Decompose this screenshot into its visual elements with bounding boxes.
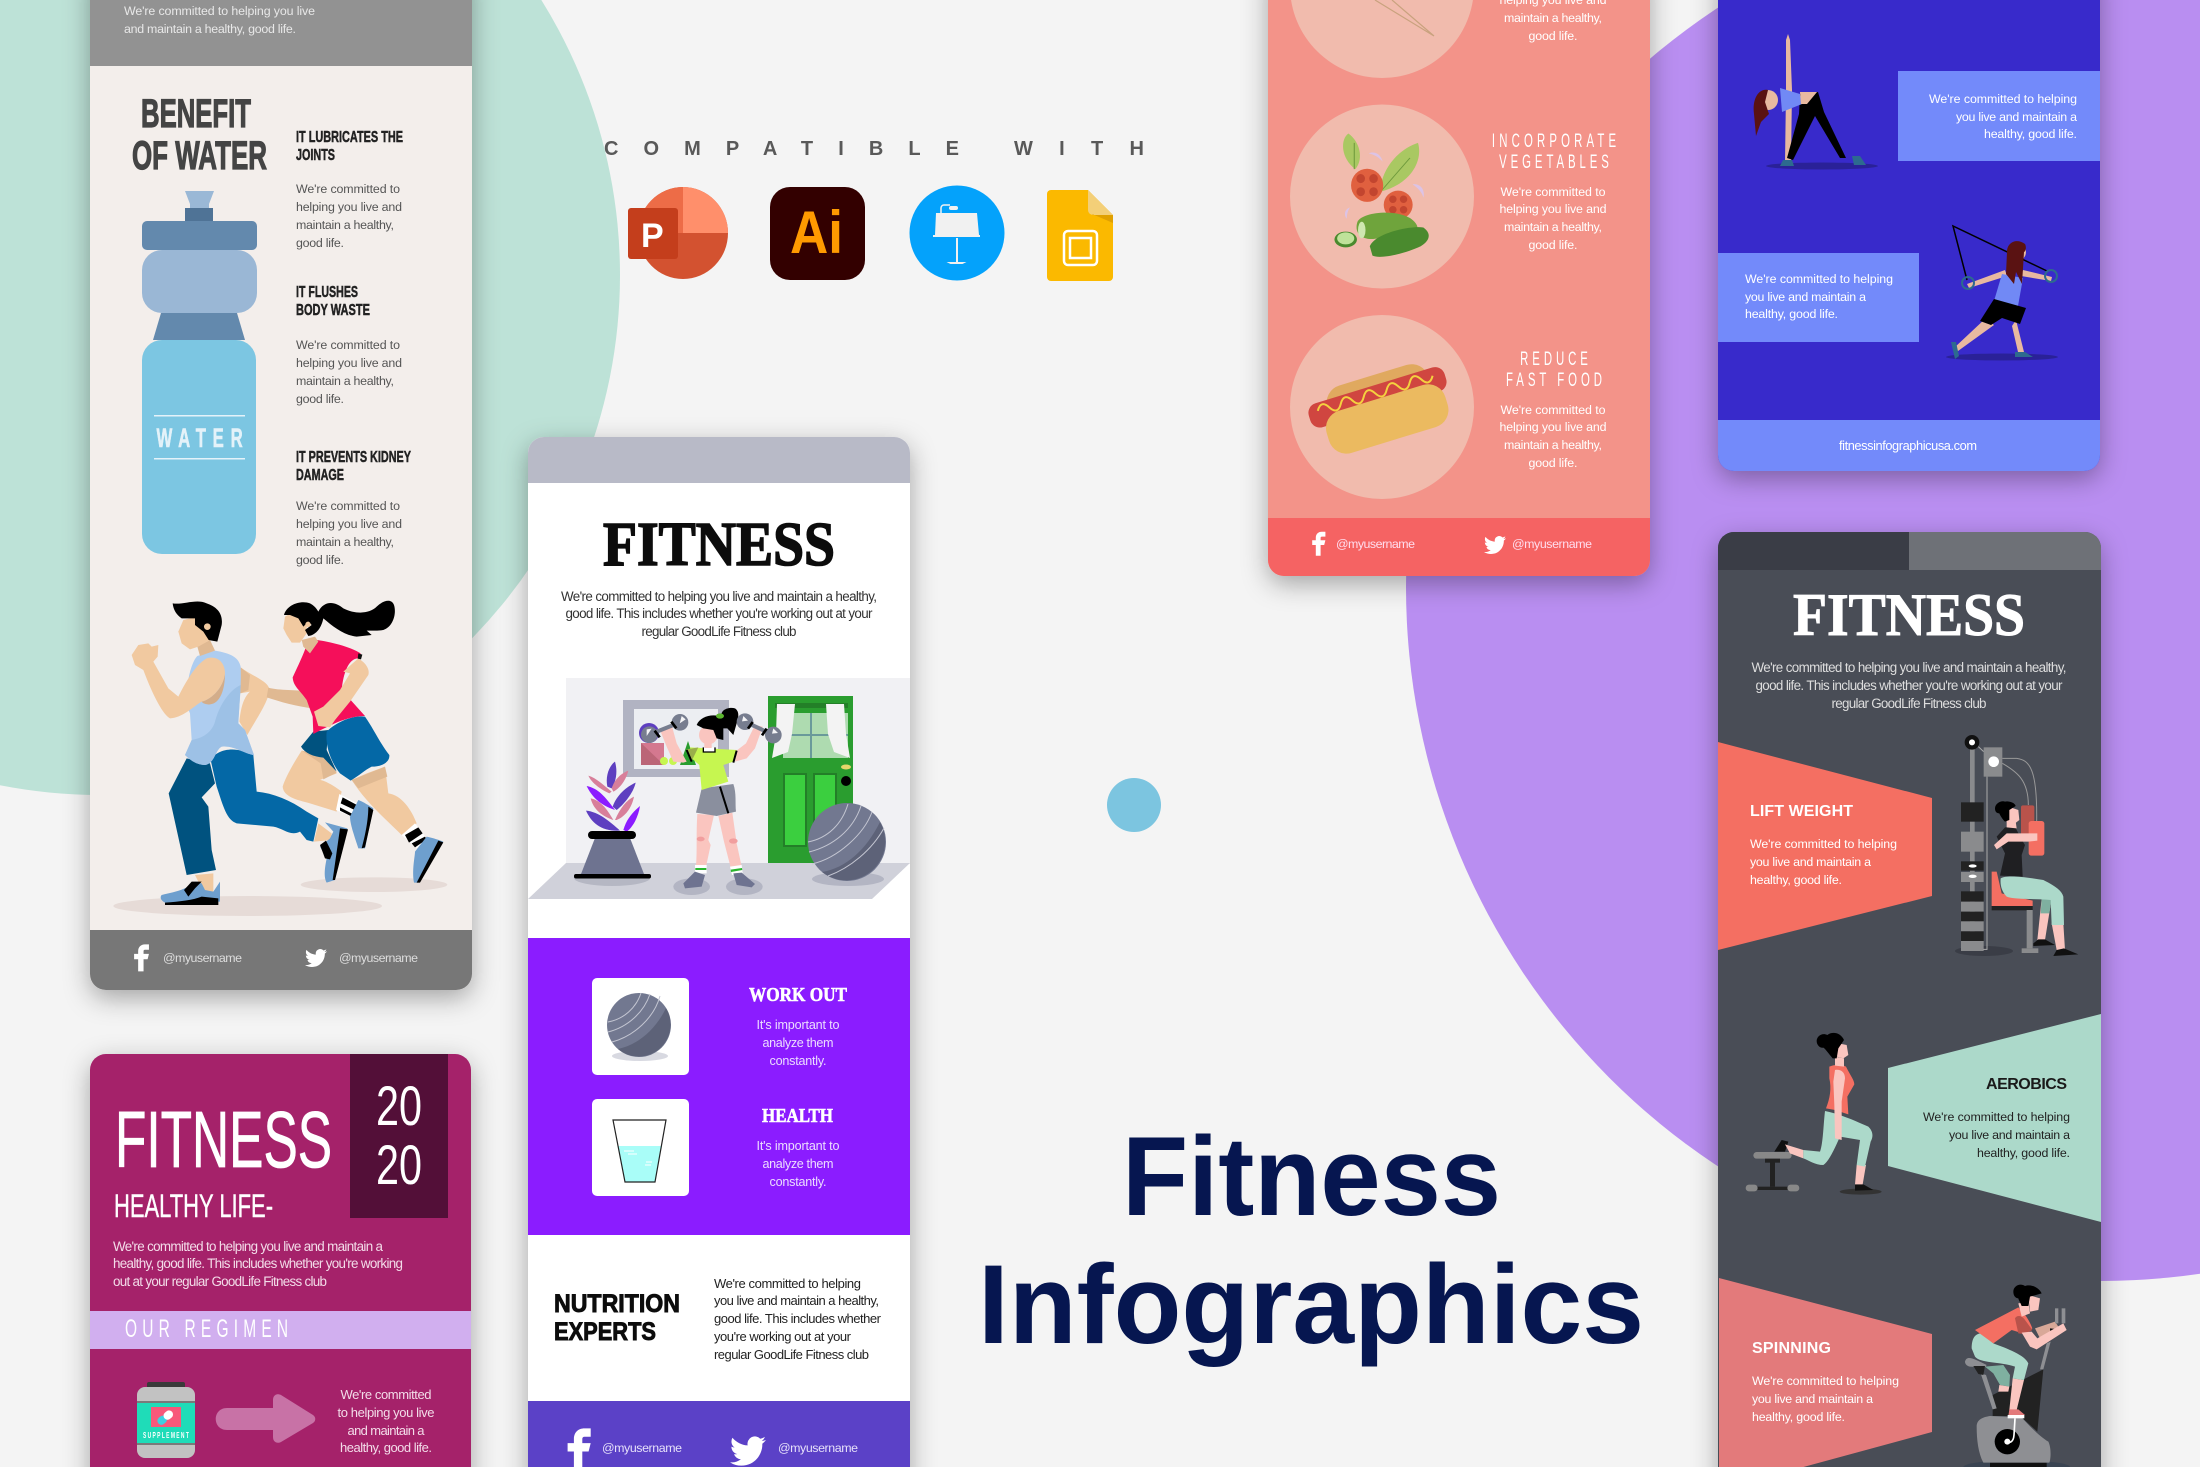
icon: water bottle	[142, 191, 257, 554]
heading: benefit of water: OF WATER	[132, 134, 267, 178]
benefit 3: prevents kidney damage: maintain a healthy,	[296, 535, 394, 549]
decorative mint circle	[0, 0, 620, 795]
panel: fitness white and purple	[528, 437, 910, 1467]
callout: spinning: We're committed to helping	[1752, 1374, 1899, 1388]
heading: nutrition experts: EXPERTS	[554, 1318, 656, 1346]
panel: nutrition salmon	[1268, 0, 1650, 576]
illustration: triangle pose	[1754, 34, 1878, 170]
intro text on grey band: We're committed to helping you live	[124, 4, 315, 18]
callout: bottom: you live and maintain a	[1745, 290, 1866, 304]
footer social handles: @myusername	[1336, 537, 1415, 551]
regimen text: and maintain a	[348, 1423, 425, 1438]
icon: twitter	[305, 949, 327, 967]
item: cut off top: maintain a healthy,	[1504, 11, 1602, 25]
benefit 1: lubricates joints	[296, 129, 403, 250]
item: reduce fast food: FAST FOOD	[1506, 370, 1602, 391]
benefit 2: flushes body waste: BODY WASTE	[296, 302, 370, 319]
regimen text	[338, 1387, 434, 1455]
intro text: We're committed to helping you live and maintain a healthy,	[1752, 660, 2066, 675]
benefit 1: lubricates joints: good life.	[296, 236, 344, 250]
callout: aerobics	[1888, 1014, 2101, 1222]
intro text: healthy, good life. This includes whether you're working	[113, 1256, 403, 1271]
heading: fitness: FITNESS	[1793, 582, 2025, 648]
panel: exercises blue	[1718, 0, 2100, 471]
row: work out: analyze them	[762, 1036, 834, 1050]
intro text	[1752, 660, 2066, 711]
row: health: HEALTH	[762, 1105, 833, 1127]
callout: aerobics: We're committed to helping	[1923, 1110, 2070, 1124]
icon: exercise ball	[607, 993, 671, 1061]
callout: spinning: SPINNING	[1752, 1340, 1831, 1357]
icon: vegetables	[1334, 133, 1429, 257]
decorative purple circle	[1406, 0, 2200, 1281]
intro text: regular GoodLife Fitness club	[642, 624, 796, 639]
year block: 20	[376, 1133, 422, 1196]
intro text	[113, 1239, 403, 1289]
row: health: It's important to	[756, 1139, 840, 1153]
illustration: spinning bike	[1963, 1285, 2070, 1467]
subheading: healthy life: HEALTHY LIFE-	[114, 1188, 273, 1224]
benefit 2: flushes body waste	[296, 284, 402, 406]
decorative blue dot	[1107, 778, 1161, 832]
item: reduce fast food	[1290, 315, 1607, 499]
callout: bottom: We're committed to helping	[1745, 272, 1893, 286]
callout: lift weight	[1718, 742, 1932, 950]
row: health: analyze them	[762, 1157, 834, 1171]
footer social handles	[1312, 532, 1592, 556]
intro text: good life. This includes whether you're working out at your	[566, 606, 873, 621]
callout: spinning: healthy, good life.	[1752, 1410, 1845, 1424]
item: incorporate vegetables: good life.	[1528, 238, 1578, 252]
footer social handles: @myusername	[602, 1441, 682, 1455]
item: incorporate vegetables: VEGETABLES	[1499, 152, 1609, 173]
benefit 2: flushes body waste: We're committed to	[296, 338, 400, 352]
illustration: weight machine	[1955, 735, 2078, 956]
regimen text: healthy, good life.	[340, 1440, 432, 1455]
benefit 3: prevents kidney damage: good life.	[296, 553, 344, 567]
nutrition text	[714, 1276, 882, 1362]
row: health	[592, 1099, 840, 1196]
compatible with heading: COMPATIBLE	[604, 138, 959, 160]
intro text: We're committed to helping you live and maintain a healthy,	[561, 589, 877, 604]
item: incorporate vegetables: INCORPORATE	[1492, 131, 1616, 152]
item: incorporate vegetables	[1290, 104, 1616, 288]
nutrition text: We're committed to helping	[714, 1276, 861, 1291]
intro text: good life. This includes whether you're working out at your	[1756, 678, 2063, 693]
main title: Infographics	[978, 1242, 1644, 1367]
heading: fitness: FITNESS	[603, 511, 835, 579]
icon: keynote	[910, 186, 1004, 280]
benefit 2: flushes body waste: maintain a healthy,	[296, 374, 394, 388]
regimen text: to helping you live	[338, 1405, 434, 1420]
icon: powerpoint	[628, 187, 728, 279]
item: reduce fast food: good life.	[1528, 456, 1578, 470]
intro text on grey band: and maintain a healthy, good life.	[124, 22, 296, 36]
callout: aerobics: AEROBICS	[1986, 1076, 2067, 1093]
callout: bottom	[1718, 253, 1919, 342]
benefit 3: prevents kidney damage: We're committed to	[296, 499, 400, 513]
item: reduce fast food: maintain a healthy,	[1504, 438, 1602, 452]
icon: illustrator	[770, 187, 865, 280]
icon: facebook	[568, 1428, 591, 1467]
benefit 2: flushes body waste: helping you live and	[296, 356, 402, 370]
heading: benefit of water: BENEFIT	[141, 92, 251, 136]
item: reduce fast food: helping you live and	[1500, 420, 1607, 434]
footer social handles	[568, 1428, 858, 1467]
benefit 3: prevents kidney damage: DAMAGE	[296, 467, 344, 484]
item: reduce fast food: We're committed to	[1500, 403, 1606, 417]
nutrition text: you're working out at your	[714, 1329, 852, 1344]
illustration: two runners	[113, 601, 447, 916]
icon: hot dog	[1303, 355, 1459, 462]
item: cut off top: good life.	[1528, 29, 1578, 43]
row: work out: It's important to	[756, 1018, 840, 1032]
callout: lift weight: healthy, good life.	[1750, 873, 1842, 887]
band: our regimen: OUR REGIMEN	[125, 1315, 288, 1343]
panel: benefit of water	[90, 0, 472, 990]
benefit 3: prevents kidney damage: helping you live and	[296, 517, 402, 531]
callout: top: healthy, good life.	[1984, 127, 2077, 141]
nutrition text: good life. This includes whether	[714, 1311, 882, 1326]
regimen text: We're committed	[340, 1387, 432, 1402]
row: work out: WORK OUT	[749, 984, 848, 1006]
illustration: home workout	[528, 678, 910, 899]
item: incorporate vegetables: maintain a healthy,	[1504, 220, 1602, 234]
panel: fitness 2020 magenta	[90, 1054, 471, 1467]
item: reduce fast food: REDUCE	[1520, 349, 1588, 370]
icon: google slides	[1047, 190, 1113, 281]
row: work out	[592, 978, 848, 1075]
icon: facebook	[1312, 532, 1325, 556]
intro text: We're committed to helping you live and maintain a	[113, 1239, 384, 1254]
callout: spinning	[1719, 1278, 1932, 1467]
main title: Fitness	[1122, 1114, 1501, 1239]
callout: lift weight: We're committed to helping	[1750, 837, 1897, 851]
callout: top: We're committed to helping	[1929, 92, 2077, 106]
benefit 1: lubricates joints: IT LUBRICATES THE	[296, 129, 403, 146]
intro text on grey band	[124, 4, 315, 36]
callout: aerobics: you live and maintain a	[1949, 1128, 2070, 1142]
heading: nutrition experts: NUTRITION	[554, 1290, 680, 1318]
item: cut off top	[1290, 0, 1607, 78]
icon: supplement bottle: SUPPLEMENT	[143, 1432, 189, 1440]
benefit 3: prevents kidney damage: IT PREVENTS KIDNEY	[296, 449, 411, 466]
row: health: constantly.	[770, 1175, 826, 1189]
icon: water bottle: WATER	[156, 423, 243, 453]
compatible with heading	[604, 138, 1144, 160]
main title	[978, 1114, 1644, 1367]
row: work out: constantly.	[770, 1054, 826, 1068]
benefit 1: lubricates joints: JOINTS	[296, 147, 335, 164]
compatible with heading: WITH	[1014, 138, 1144, 160]
icon: glass of water	[613, 1120, 666, 1182]
panel: fitness dark	[1718, 532, 2101, 1467]
benefit 3: prevents kidney damage	[296, 449, 411, 567]
callout: lift weight: you live and maintain a	[1750, 855, 1871, 869]
footer social handles: @myusername	[778, 1441, 858, 1455]
callout: bottom: healthy, good life.	[1745, 307, 1838, 321]
intro text	[561, 589, 877, 639]
heading: nutrition experts	[554, 1290, 680, 1346]
benefit 2: flushes body waste: IT FLUSHES	[296, 284, 358, 301]
icon: twitter	[1484, 536, 1506, 554]
arrow	[216, 1394, 315, 1443]
year block	[350, 1054, 448, 1218]
callout: spinning: you live and maintain a	[1752, 1392, 1873, 1406]
item: incorporate vegetables: helping you live and	[1500, 202, 1607, 216]
heading: benefit of water	[132, 92, 267, 178]
benefit 2: flushes body waste: good life.	[296, 392, 344, 406]
website url: fitnessinfographicusa.com	[1839, 438, 1977, 453]
icon: facebook	[134, 944, 149, 971]
benefit 1: lubricates joints: We're committed to	[296, 182, 400, 196]
benefit 1: lubricates joints: helping you live and	[296, 200, 402, 214]
heading: fitness: FITNESS	[115, 1095, 332, 1184]
band: our regimen	[90, 1311, 471, 1349]
footer social handles: @myusername	[1512, 537, 1592, 551]
illustration: lunge on bench	[1746, 1033, 1882, 1195]
icon: illustrator: Ai	[790, 199, 843, 266]
nutrition text: you live and maintain a healthy,	[714, 1293, 879, 1308]
icon: supplement bottle	[137, 1382, 195, 1458]
footer social handles: @myusername	[163, 951, 242, 965]
callout: aerobics: healthy, good life.	[1977, 1146, 2070, 1160]
item: incorporate vegetables: We're committed to	[1500, 185, 1606, 199]
callout: lift weight: LIFT WEIGHT	[1750, 803, 1853, 820]
illustration: resistance band lunge	[1946, 226, 2058, 360]
icon: powerpoint: P	[641, 217, 664, 255]
year block: 20	[376, 1074, 422, 1137]
intro text: regular GoodLife Fitness club	[1832, 696, 1986, 711]
intro text: out at your regular GoodLife Fitness club	[113, 1274, 327, 1289]
benefit 1: lubricates joints: maintain a healthy,	[296, 218, 394, 232]
callout: top	[1898, 71, 2100, 161]
footer social handles: @myusername	[339, 951, 418, 965]
nutrition text: regular GoodLife Fitness club	[714, 1347, 869, 1362]
footer social handles	[134, 944, 418, 971]
icon: twitter	[730, 1436, 766, 1466]
callout: top: you live and maintain a	[1956, 110, 2077, 124]
